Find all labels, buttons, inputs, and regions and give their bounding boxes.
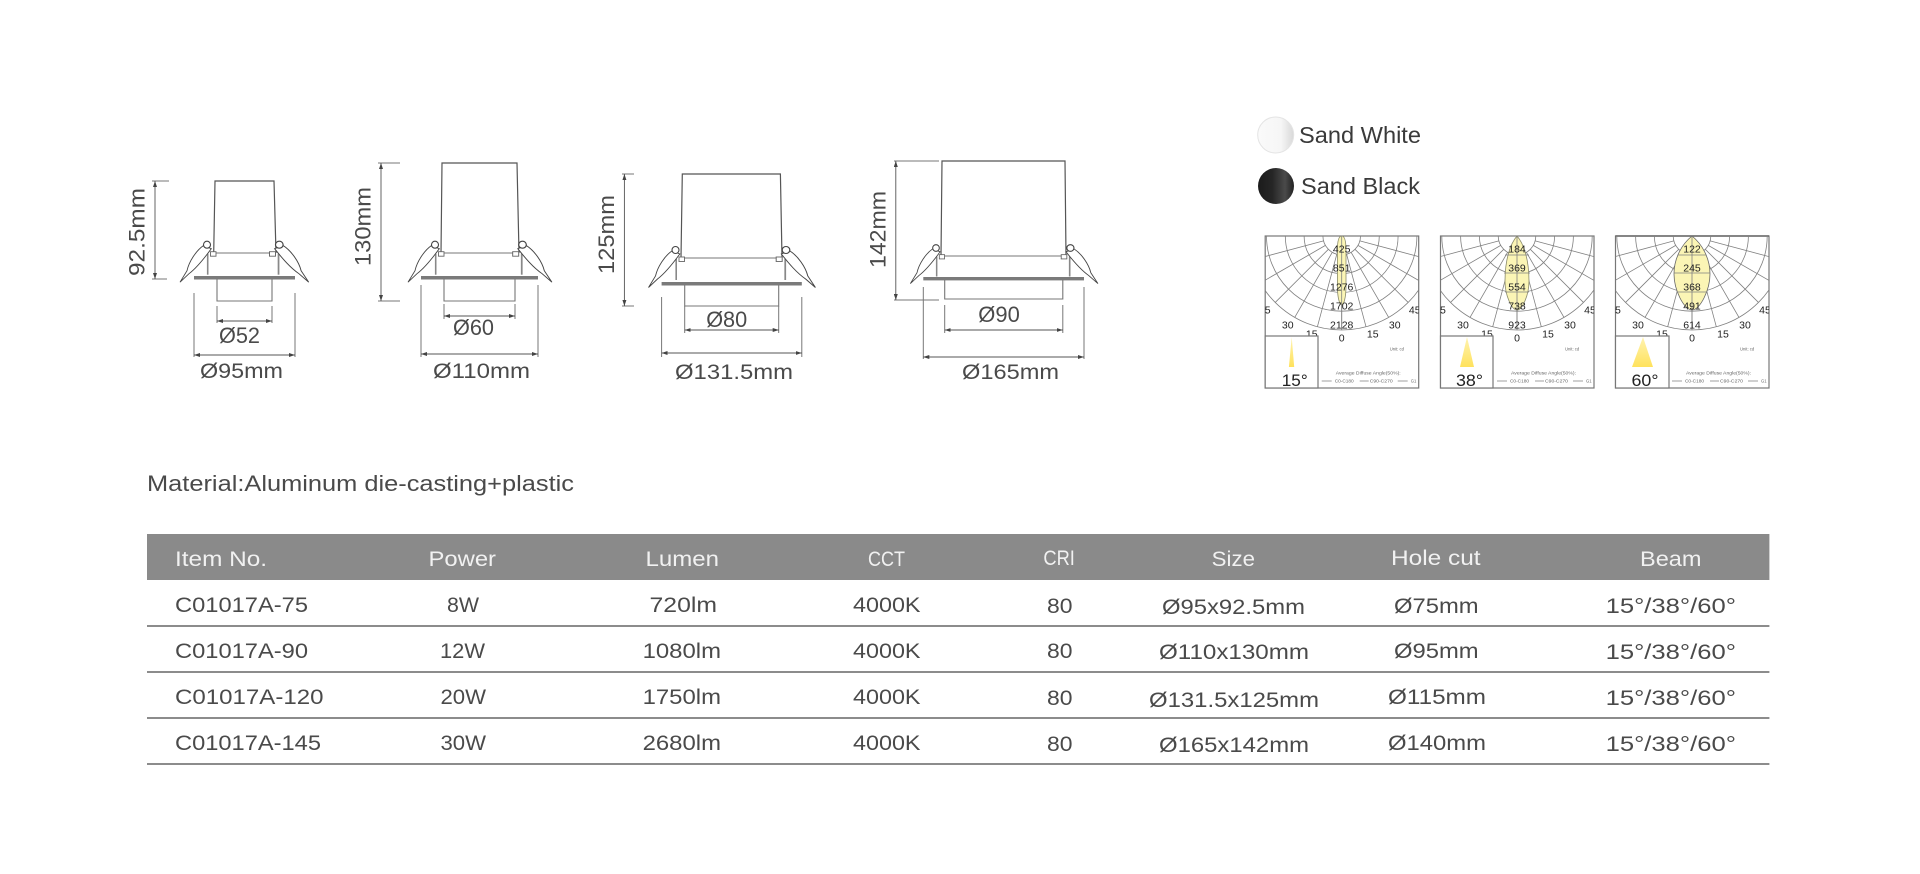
chart legend: Average Diffuse Angle(50%): [1686, 370, 1751, 376]
intensity and angle labels: 45 [1259, 304, 1271, 316]
chart legend: Unit: cd [1565, 346, 1580, 352]
outer diameter dimension [662, 297, 802, 357]
intensity and angle labels: 15 [1656, 328, 1668, 340]
intensity and angle labels: 425 [1333, 244, 1351, 256]
row: C01017A-145: 15°/38°/60° [1606, 733, 1736, 756]
inner diameter label: Ø80 [706, 307, 747, 332]
intensity and angle labels: 30 [1282, 320, 1294, 332]
lower cup [217, 279, 272, 301]
intensity and angle labels [1434, 244, 1596, 344]
intensity and angle labels: 245 [1683, 262, 1701, 274]
intensity and angle labels: 45 [1409, 304, 1421, 316]
beam inset [1265, 336, 1318, 388]
chart legend: C90-C270 [1545, 378, 1569, 384]
row: C01017A-90: 12W [440, 640, 485, 663]
table header: CCT [868, 548, 905, 571]
inner diameter label: Ø90 [978, 302, 1020, 327]
height dimension [622, 174, 634, 306]
diagram: lamp 2 [351, 163, 552, 383]
polar grid [1598, 142, 1786, 330]
row: C01017A-120: 20W [440, 686, 486, 709]
intensity and angle labels: 851 [1333, 262, 1351, 274]
intensity and angle labels: 1276 [1330, 282, 1354, 294]
chart legend: G1 [1411, 378, 1417, 384]
table header: Item No. [175, 548, 267, 571]
flange [194, 276, 295, 280]
beam angle label: 38° [1456, 371, 1483, 390]
chart legend [1497, 346, 1592, 384]
intensity and angle labels: 2128 [1330, 320, 1354, 332]
row: C01017A-90: Ø110x130mm [1159, 641, 1309, 664]
intensity and angle labels: 30 [1564, 320, 1576, 332]
chart legend [1672, 346, 1767, 384]
chart frame [1616, 236, 1769, 388]
height label: 92.5mm [124, 188, 149, 276]
intensity and angle labels: 45 [1609, 304, 1621, 316]
intensity and angle labels: 491 [1683, 300, 1701, 312]
intensity and angle labels: 15 [1367, 328, 1379, 340]
table header: Lumen [646, 548, 719, 571]
flange [662, 282, 802, 286]
row: C01017A-145 [147, 732, 1769, 764]
height dimension [378, 163, 400, 301]
inner diameter dimension [217, 306, 272, 323]
lamp body [214, 181, 276, 253]
table header: Hole cut [1391, 547, 1481, 570]
row: C01017A-75: 8W [447, 594, 479, 617]
polar grid [1423, 142, 1611, 330]
beam cone icon [1632, 337, 1653, 367]
light distribution lobe [1505, 236, 1529, 310]
intensity and angle labels: 368 [1683, 282, 1701, 294]
row: C01017A-90: 4000K [853, 640, 920, 663]
row: C01017A-120: 1750lm [643, 686, 721, 709]
beam angle label: 15° [1282, 371, 1308, 390]
outer diameter label: Ø165mm [962, 361, 1059, 384]
row: C01017A-75: 720lm [650, 594, 717, 617]
polar chart: 15 degree beam [1264, 235, 1420, 389]
flange [923, 277, 1084, 280]
intensity and angle labels: 0 [1514, 332, 1520, 344]
intensity and angle labels: 614 [1683, 320, 1701, 332]
row: C01017A-120: 15°/38°/60° [1606, 687, 1736, 710]
table header: Beam [1640, 548, 1702, 571]
row: C01017A-120 [147, 686, 1769, 718]
lamp body [681, 174, 782, 258]
lower cup [945, 280, 1063, 299]
lower cup [444, 279, 515, 301]
height label: 130mm [351, 187, 376, 266]
outer diameter dimension [923, 287, 1084, 359]
intensity and angle labels: 923 [1508, 320, 1526, 332]
row: C01017A-145: 4000K [853, 732, 920, 755]
row: C01017A-145: Ø140mm [1388, 732, 1486, 755]
row: C01017A-90: C01017A-90 [175, 640, 308, 663]
intensity and angle labels: 1702 [1330, 300, 1354, 312]
chart legend: G1 [1761, 378, 1767, 384]
row: C01017A-120: C01017A-120 [175, 686, 324, 709]
spring clips [648, 246, 815, 288]
diagram: lamp 1 [124, 181, 309, 383]
light distribution lobe [1337, 236, 1346, 305]
chart frame [1440, 236, 1594, 388]
chart legend: C0-C180 [1685, 378, 1705, 384]
row: C01017A-75: Ø75mm [1394, 595, 1479, 618]
row: C01017A-75 [147, 594, 1769, 626]
chart legend: C0-C180 [1510, 378, 1530, 384]
height dimension [152, 181, 169, 279]
inner diameter dimension [945, 305, 1063, 333]
row: C01017A-90: Ø95mm [1394, 640, 1479, 663]
intensity and angle labels [1259, 244, 1421, 344]
swatch label: Sand Black [1301, 173, 1420, 199]
intensity and angle labels: 45 [1584, 304, 1596, 316]
chart legend: Average Diffuse Angle(50%): [1336, 370, 1401, 376]
row: C01017A-90: 80 [1047, 640, 1072, 663]
row: C01017A-145: 80 [1047, 733, 1072, 756]
intensity and angle labels: 45 [1759, 304, 1771, 316]
inner diameter dimension [685, 306, 779, 333]
intensity and angle labels: 15 [1306, 328, 1318, 340]
inner diameter label: Ø60 [453, 315, 494, 340]
intensity and angle labels: 30 [1389, 320, 1401, 332]
height dimension [894, 161, 939, 300]
swatch label: Sand White [1299, 122, 1421, 148]
intensity and angle labels: 122 [1683, 244, 1701, 256]
outer diameter dimension [194, 293, 295, 357]
chart legend: Unit: cd [1740, 346, 1755, 352]
polar chart: 60 degree beam [1614, 235, 1770, 389]
outer diameter label: Ø131.5mm [675, 361, 793, 384]
height label: 125mm [594, 195, 619, 274]
outer diameter dimension [421, 285, 538, 357]
beam cone icon [1460, 337, 1474, 367]
material note: Material:Aluminum die-casting+plastic [147, 471, 574, 496]
row: C01017A-120: Ø115mm [1388, 686, 1486, 709]
chart legend: C90-C270 [1370, 378, 1394, 384]
intensity and angle labels: 45 [1434, 304, 1446, 316]
spring clips [910, 245, 1098, 284]
row: C01017A-120: Ø131.5x125mm [1149, 689, 1319, 712]
beam angle label: 60° [1632, 371, 1658, 390]
inner diameter dimension [444, 304, 515, 319]
specification table [147, 534, 1769, 764]
flange [421, 276, 538, 280]
intensity and angle labels: 15 [1717, 328, 1729, 340]
intensity and angle labels: 15 [1542, 328, 1554, 340]
swatch circle [1258, 117, 1294, 153]
chart legend: Unit: cd [1390, 346, 1405, 352]
inner diameter label: Ø52 [219, 323, 260, 348]
lower cup [685, 285, 779, 306]
outer diameter label: Ø95mm [200, 360, 283, 383]
row: C01017A-145: 30W [440, 732, 486, 755]
polar chart: 38 degree beam [1440, 235, 1595, 389]
beam inset [1440, 336, 1493, 388]
intensity and angle labels: 30 [1632, 320, 1644, 332]
intensity and angle labels: 554 [1508, 282, 1526, 294]
intensity and angle labels: 369 [1508, 262, 1526, 274]
spring clips [180, 241, 309, 282]
intensity and angle labels: 0 [1339, 332, 1345, 344]
intensity and angle labels: 0 [1689, 332, 1695, 344]
diagram: lamp 4 [866, 161, 1098, 384]
row: C01017A-145: 2680lm [643, 732, 721, 755]
spring clips [408, 241, 552, 282]
row: C01017A-90: 15°/38°/60° [1606, 641, 1736, 664]
colour swatch: Sand White [1258, 117, 1421, 153]
row: C01017A-90: 1080lm [643, 640, 721, 663]
table header: CRI [1043, 547, 1075, 570]
light distribution lobe [1674, 236, 1710, 310]
swatch circle [1258, 168, 1294, 204]
intensity and angle labels: 15 [1481, 328, 1493, 340]
row: C01017A-90 [147, 640, 1769, 672]
row: C01017A-120: 4000K [853, 686, 920, 709]
height label: 142mm [866, 191, 890, 268]
row: C01017A-75: 15°/38°/60° [1606, 595, 1736, 618]
chart legend [1322, 346, 1417, 384]
row: C01017A-75: 4000K [853, 594, 920, 617]
beam cone icon [1289, 337, 1294, 367]
intensity and angle labels: 738 [1508, 300, 1526, 312]
lamp body [941, 161, 1066, 256]
table header [147, 534, 1769, 580]
row: C01017A-120: 80 [1047, 687, 1072, 710]
table header: Size [1212, 548, 1255, 571]
outer diameter label: Ø110mm [433, 360, 530, 383]
chart legend: G1 [1586, 378, 1592, 384]
row: C01017A-75: Ø95x92.5mm [1162, 596, 1305, 619]
intensity and angle labels: 30 [1457, 320, 1469, 332]
colour swatch: Sand Black [1258, 168, 1420, 204]
intensity and angle labels: 184 [1508, 244, 1526, 256]
chart legend: C90-C270 [1720, 378, 1744, 384]
polar grid [1248, 142, 1436, 330]
row: C01017A-145: Ø165x142mm [1159, 734, 1309, 757]
chart legend: C0-C180 [1335, 378, 1354, 384]
intensity and angle labels: 30 [1739, 320, 1751, 332]
chart legend: Average Diffuse Angle(50%): [1511, 370, 1576, 376]
intensity and angle labels [1609, 244, 1771, 344]
diagram: lamp 3 [594, 174, 815, 384]
table header: Power [428, 548, 496, 571]
row: C01017A-75: C01017A-75 [175, 594, 308, 617]
row: C01017A-75: 80 [1047, 595, 1072, 618]
row: C01017A-145: C01017A-145 [175, 732, 321, 755]
chart frame [1265, 236, 1419, 388]
lamp body [441, 163, 519, 253]
beam inset [1616, 336, 1669, 388]
